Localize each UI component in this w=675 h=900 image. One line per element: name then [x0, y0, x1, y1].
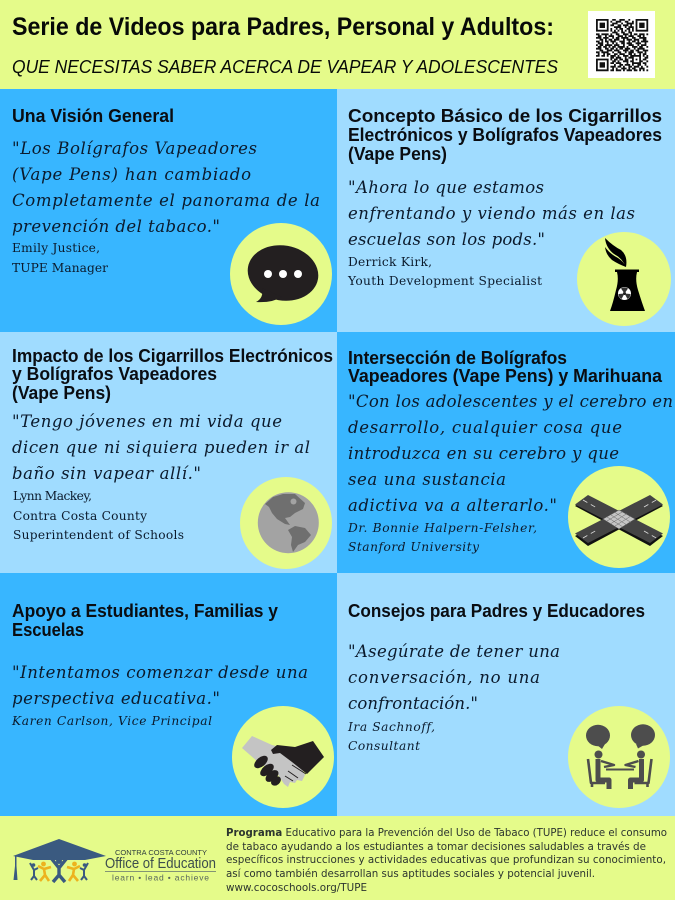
- attribution: [12, 241, 108, 275]
- heading: Consejos para Padres y Educadores: [348, 600, 645, 621]
- attribution: Superintendent of Schools: [13, 528, 184, 542]
- header band: [0, 0, 675, 89]
- heading: Escuelas: [12, 619, 84, 640]
- heading: Apoyo a Estudiantes, Familias y: [12, 600, 279, 621]
- panel: Concepto Básico: [337, 89, 675, 332]
- attribution: [13, 489, 184, 542]
- heading: (Vape Pens): [12, 382, 111, 403]
- quote: [12, 663, 308, 708]
- panel: Una Visión General: [0, 89, 337, 332]
- heading: [348, 105, 662, 164]
- quote: "Asegúrate de tener una: [348, 642, 560, 661]
- quote: [348, 178, 635, 249]
- icon: road intersection: [568, 466, 670, 568]
- attribution: TUPE Manager: [12, 261, 108, 275]
- quote: conversación, no una: [348, 668, 540, 687]
- heading: Impacto de los Cigarrillos Electrónicos: [12, 345, 333, 366]
- heading: Electrónicos y Bolígrafos Vapeadores: [348, 124, 662, 145]
- quote: sea una sustancia: [348, 470, 506, 489]
- quote: "Tengo jóvenes en mi vida que: [12, 412, 282, 431]
- quote: dicen que ni siquiera pueden ir al: [12, 438, 310, 457]
- quote: desarrollo, cualquier cosa que: [348, 418, 622, 437]
- attribution: Lynn Mackey,: [13, 489, 92, 503]
- logo: Contra Costa County Office of Education: [13, 839, 216, 882]
- heading: [12, 345, 333, 403]
- attribution: [347, 255, 542, 288]
- program description: www.cocoschools.org/TUPE: [226, 881, 367, 894]
- quote: escuelas son los pods.": [348, 230, 545, 249]
- quote: enfrentando y viendo más en las: [348, 204, 635, 223]
- attribution: Stanford University: [348, 540, 480, 554]
- quote: "Intentamos comenzar desde una: [12, 663, 308, 682]
- program description: así como también desarrollan sus aptitudes sociales y potencial juvenil.: [226, 867, 595, 880]
- logo: Contra Costa County Office of Education: learn • lead • achieve: [112, 872, 209, 882]
- panel: Intersección: [337, 332, 675, 573]
- attribution: Dr. Bonnie Halpern-Felsher,: [347, 521, 537, 535]
- attribution: [347, 720, 435, 753]
- heading: [12, 600, 279, 640]
- quote: "Ahora lo que estamos: [348, 178, 544, 197]
- heading: Concepto Básico de los Cigarrillos: [348, 105, 662, 126]
- program description: [226, 826, 667, 894]
- icon: nuclear tower: [577, 232, 671, 326]
- program description: de tabaco ayudando a los estudiantes a tomar decisiones saludables a través de: [226, 840, 646, 853]
- heading: [348, 347, 663, 386]
- quote: "Los Bolígrafos Vapeadores: [12, 139, 257, 158]
- title: Serie de Videos para Padres, Personal y Adultos:: [12, 13, 554, 41]
- logo: Contra Costa County Office of Education: Office of Education: [105, 855, 216, 872]
- attribution: Emily Justice,: [12, 241, 100, 255]
- attribution: [347, 521, 537, 554]
- quote: "Con los adolescentes y el cerebro en: [348, 392, 673, 411]
- quote: [12, 412, 310, 483]
- attribution: Ira Sachnoff,: [347, 720, 435, 734]
- quote: [348, 642, 560, 713]
- quote: adictiva va a alterarlo.": [348, 496, 557, 515]
- attribution: Derrick Kirk,: [348, 255, 432, 269]
- attribution: Karen Carlson, Vice Principal: [11, 714, 212, 728]
- attribution: Youth Development Specialist: [347, 274, 542, 288]
- logo: Contra Costa County Office of Education: CONTRA COSTA COUNTY: [115, 848, 207, 857]
- quote: [12, 139, 320, 236]
- quote: introduzca en su cerebro y que: [348, 444, 619, 463]
- heading: y Bolígrafos Vapeadores: [12, 363, 217, 384]
- panel: Consejos: [337, 573, 675, 816]
- heading: Una Visión General: [12, 105, 174, 126]
- heading: (Vape Pens): [348, 143, 447, 164]
- quote: confrontación.": [348, 694, 478, 713]
- subtitle: QUE NECESITAS SABER ACERCA DE VAPEAR Y ADOLESCENTES: [12, 56, 559, 77]
- attribution: Contra Costa County: [13, 509, 147, 523]
- panel: Impacto: [0, 332, 337, 573]
- footer band: [0, 816, 675, 900]
- quote: baño sin vapear allí.": [12, 464, 201, 483]
- icon: two people talking: [568, 706, 670, 808]
- heading: Vapeadores (Vape Pens) y Marihuana: [348, 365, 663, 386]
- quote: Completamente el panorama de la: [12, 191, 320, 210]
- icon: speech bubble: [230, 223, 332, 325]
- heading: Intersección de Bolígrafos: [348, 347, 567, 368]
- attribution: Consultant: [348, 739, 420, 753]
- quote: perspectiva educativa.": [12, 689, 220, 708]
- QR code: [588, 11, 655, 78]
- icon: globe: [240, 477, 332, 569]
- quote: prevención del tabaco.": [12, 217, 220, 236]
- icon: handshake: [232, 706, 334, 808]
- quote: (Vape Pens) han cambiado: [12, 165, 251, 184]
- panel: Apoyo: [0, 573, 337, 816]
- quote: [348, 392, 673, 515]
